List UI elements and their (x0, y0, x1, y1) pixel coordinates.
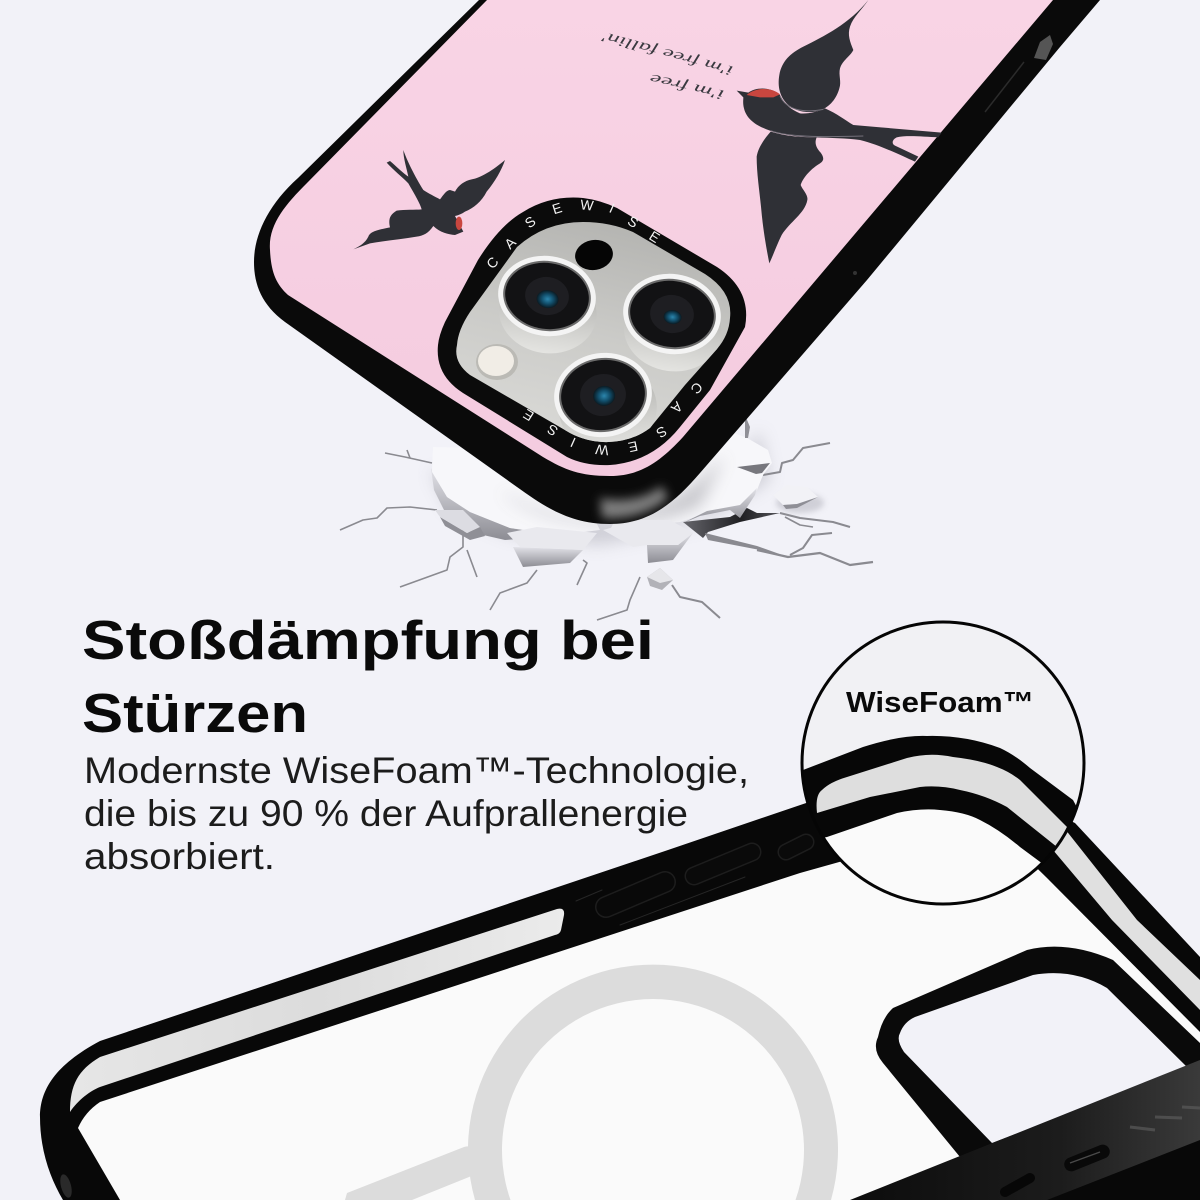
heading (82, 609, 654, 744)
foam strip right (1053, 829, 1200, 1010)
large swallow (737, 0, 942, 263)
magnifier: WiseFoam detail (780, 622, 1100, 904)
clear back panel (78, 832, 1200, 1200)
brand lettering on camera ring (483, 196, 706, 459)
side buttons (576, 842, 806, 925)
band streaks (1130, 1107, 1200, 1130)
small swallow (353, 150, 505, 249)
camera module (476, 240, 721, 442)
lens fill (802, 622, 1084, 904)
heading: Stoßdämpfung bei (82, 609, 654, 671)
small right fragment (773, 485, 824, 513)
dark gap (683, 508, 780, 538)
camera window (456, 222, 730, 442)
lower clear case (40, 760, 1200, 1200)
lens outline (802, 622, 1084, 904)
brand lettering on camera ring: S (522, 213, 539, 231)
pink back (270, 0, 1053, 476)
phone shadow (500, 455, 725, 524)
camera cutout (899, 973, 1188, 1143)
left plate wall (431, 468, 560, 540)
brand lettering on camera ring: A (501, 234, 519, 252)
brand lettering on camera ring: A (668, 399, 686, 417)
brand lettering on camera ring: E (646, 227, 663, 246)
brand lettering on camera ring: S (625, 212, 641, 231)
outer black frame (40, 760, 1200, 1200)
body text: absorbiert. (84, 836, 275, 877)
handwritten lyric: i'm free (648, 70, 726, 102)
body text (84, 750, 749, 877)
magsafe pill (345, 1146, 481, 1200)
foam strip left (70, 909, 564, 1112)
lower right wedge (705, 533, 788, 557)
left small fragment (435, 510, 485, 540)
lens 2 (623, 274, 721, 372)
phone rim (254, 0, 1100, 524)
brand lettering on camera ring: E (627, 438, 639, 456)
port on side band (1005, 1143, 1112, 1192)
mic hole (575, 240, 613, 270)
brand lettering on camera ring: I (607, 200, 617, 216)
small bottom fragment (647, 568, 673, 590)
magsafe ring (468, 965, 838, 1200)
left side hole (58, 1173, 74, 1199)
brand lettering on camera ring: E (550, 199, 564, 217)
illustration: cracked ground (340, 415, 873, 620)
lens 1 (498, 256, 596, 354)
spike (745, 415, 750, 438)
left plate (432, 447, 600, 535)
brand lettering on camera ring: C (687, 379, 706, 397)
plate wedge (737, 463, 770, 474)
side buttons (853, 35, 1053, 275)
crack lines (340, 443, 873, 620)
brand lettering on camera ring: S (544, 421, 561, 440)
brand lettering on camera ring: C (483, 254, 502, 272)
handwritten lyric: i'm free fallin' (599, 28, 735, 78)
top phone case (254, 0, 1100, 524)
body text: die bis zu 90 % der Aufprallenergie (84, 793, 688, 834)
camera ring (438, 198, 746, 465)
heading: Stürzen (82, 682, 308, 744)
bottom side band (850, 1060, 1200, 1200)
rim highlight (600, 486, 668, 518)
camera cutout frame (876, 947, 1200, 1157)
lens label: WiseFoam™ (846, 687, 1034, 719)
right plate (610, 420, 772, 530)
magnified frame (804, 736, 1076, 902)
flash (476, 344, 518, 380)
brand lettering on camera ring: I (568, 434, 578, 451)
central fragment left (507, 527, 597, 567)
brand lettering on camera ring: W (580, 196, 595, 214)
right plate wall (683, 488, 757, 523)
lens 3 (554, 352, 656, 442)
brand lettering on camera ring: E (520, 406, 537, 425)
crack shadow (430, 430, 770, 545)
brand lettering on camera ring: W (594, 441, 609, 459)
brand lettering on camera ring: S (653, 423, 670, 442)
handwritten lyric (599, 28, 735, 102)
body text: Modernste WiseFoam™-Technologie, (84, 750, 749, 791)
central fragment right (603, 520, 693, 563)
